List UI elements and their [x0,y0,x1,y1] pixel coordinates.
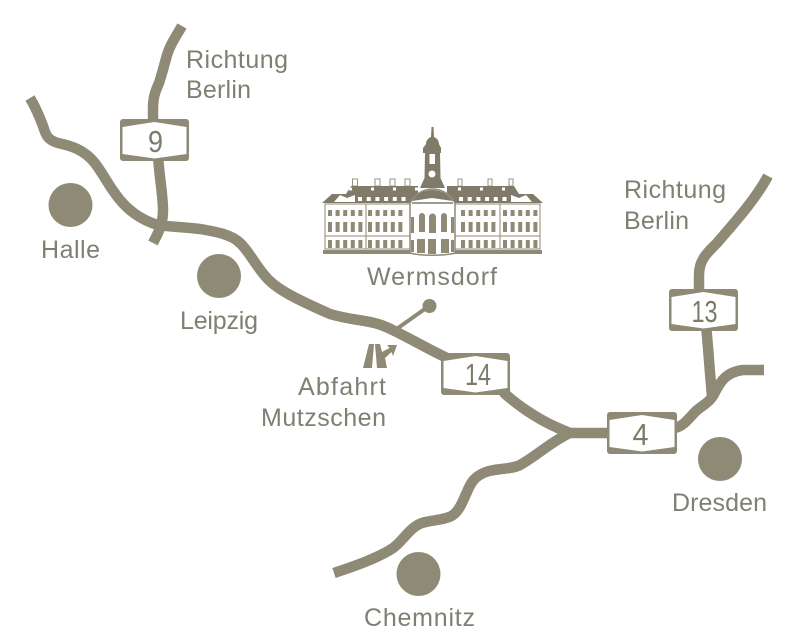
label: Dresden: Dresden [672,489,767,517]
road: A13 to Berlin [699,176,768,396]
icon: motorway exit [363,344,397,368]
label: Richtung Berlin (north-west): Berlin [186,76,251,104]
city dot: Dresden [698,437,742,481]
road sign: 13 [669,289,738,331]
city dot: Halle [48,183,92,227]
label: Abfahrt Mutzschen [261,373,386,432]
road sign: 4: 4 [632,417,648,452]
label: Abfahrt Mutzschen: Abfahrt [298,373,386,401]
label: Halle: Halle [41,236,100,264]
castle ground line [323,250,542,254]
label: Wermsdorf: Wermsdorf [367,263,497,291]
road sign: 14: 14 [465,357,491,392]
label: Leipzig: Leipzig [180,307,258,335]
label: Richtung Berlin (north-west) [186,46,288,104]
label: Richtung Berlin (north-east): Berlin [624,207,689,235]
road: A14 from Halle to Dresden [30,98,764,433]
dormer windows [358,197,508,201]
castle wings [325,204,540,249]
road: A4 to Chemnitz [334,432,572,573]
label: Richtung Berlin (north-east) [624,176,726,235]
city dot: Chemnitz [396,552,440,596]
castle windows [328,213,539,244]
road: A9 to Berlin [153,26,182,243]
label: Abfahrt Mutzschen: Mutzschen [261,404,386,432]
label: Richtung Berlin (north-west): Richtung [186,46,288,74]
exit spur to Wermsdorf [398,299,436,328]
castle tower [420,127,445,188]
roof gable ornaments [334,195,532,202]
illustration: Wermsdorf castle [322,127,543,255]
road sign: 13: 13 [692,294,718,329]
castle roofs [322,186,543,203]
label: Richtung Berlin (north-east): Richtung [624,176,726,204]
road sign: 4 [607,412,677,454]
road sign: 14 [441,353,510,395]
castle chimneys [352,179,513,186]
road sign: 9: 9 [148,124,163,159]
city dot: Leipzig [197,254,241,298]
road sign: 9 [120,119,189,161]
central pavilion [410,189,455,255]
